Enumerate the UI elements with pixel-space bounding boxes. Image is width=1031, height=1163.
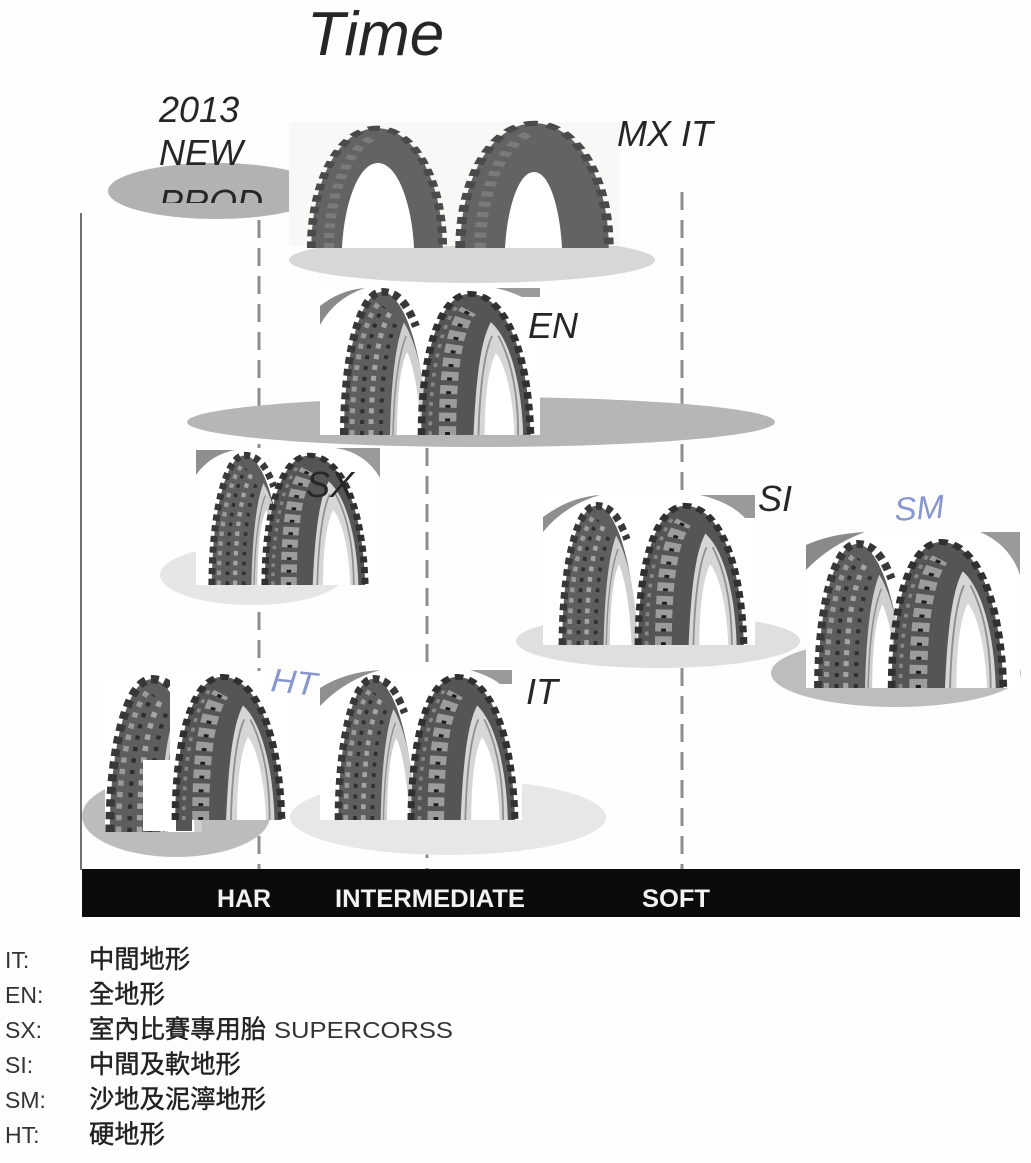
panel: EN tires — [187, 288, 775, 447]
panel: SM tires — [771, 488, 1021, 707]
legend: SI: — [5, 1052, 33, 1078]
legend: SM: — [5, 1087, 46, 1113]
intermediate boundary dashed line — [426, 448, 428, 870]
legend: IT: — [5, 947, 29, 973]
legend: 全地形 — [89, 981, 165, 1009]
legend: HT: — [5, 1122, 40, 1148]
panel: SI tires: SI — [758, 478, 792, 519]
terrain axis bar: INTERMEDIATE — [335, 885, 525, 913]
terrain axis bar: SOFT — [642, 885, 710, 913]
legend: 中間及軟地形 — [89, 1051, 241, 1079]
terrain axis bar — [82, 869, 1020, 917]
legend: SUPERCORSS — [274, 1017, 453, 1043]
legend: EN: — [5, 982, 43, 1008]
legend: 沙地及泥濘地形 — [89, 1086, 266, 1114]
panel: HT tires — [82, 661, 322, 857]
handwritten HT: HT — [269, 661, 322, 703]
title: Time — [307, 0, 444, 69]
legend: 室內比賽專用胎 — [89, 1016, 266, 1044]
panel: SX tires: SX — [306, 464, 356, 505]
legend: 中間地形 — [89, 946, 190, 974]
new product label: NEW — [159, 132, 246, 173]
new product ellipse — [108, 163, 324, 219]
new product label: 2013 — [158, 89, 239, 130]
new product label: PROD — [159, 182, 263, 223]
handwritten SM: SM — [893, 488, 946, 528]
panel: IT tires: IT — [526, 671, 561, 712]
panel: EN tires: EN — [528, 305, 579, 346]
hard boundary dashed line — [258, 220, 260, 870]
terrain axis bar: HAR — [217, 885, 271, 913]
legend: SX: — [5, 1017, 42, 1043]
legend — [5, 946, 453, 1149]
panel: IT tires — [290, 670, 606, 855]
panel: SI tires — [516, 478, 800, 668]
panel: MX IT tires — [289, 113, 716, 283]
panel: SX tires — [160, 448, 380, 605]
new product label — [158, 96, 262, 203]
vertical axis — [80, 213, 82, 870]
soft boundary dashed line — [680, 192, 684, 870]
panel: MX IT tires: MX IT — [617, 113, 716, 154]
legend: 硬地形 — [89, 1121, 165, 1149]
